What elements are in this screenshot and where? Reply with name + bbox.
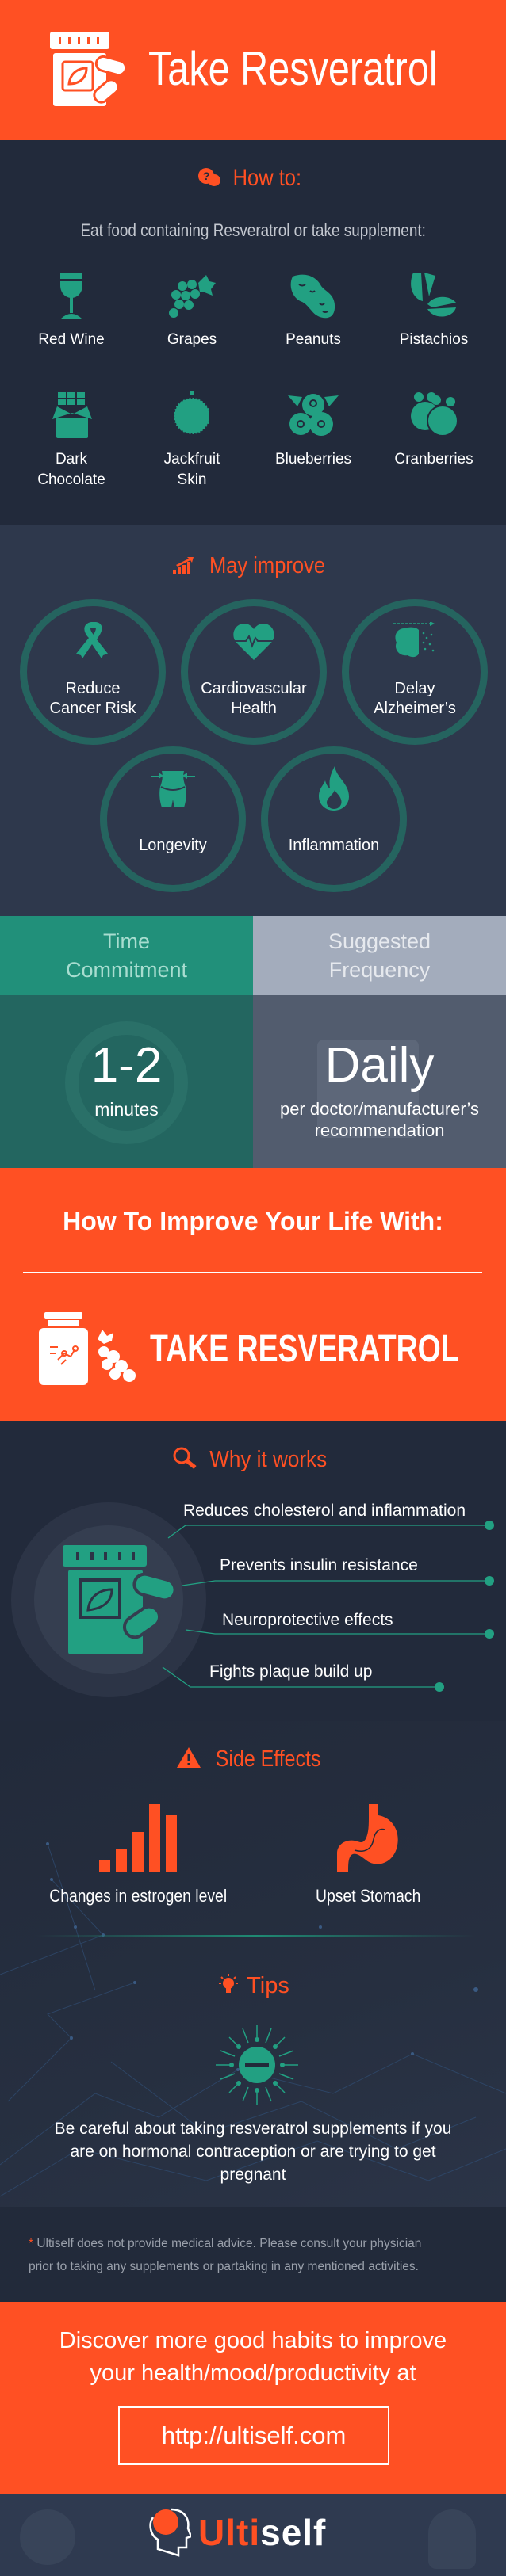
heading: may improve: May improve (209, 553, 325, 578)
icon: blueberries (288, 394, 339, 436)
label: dark chocolate: Dark (56, 451, 87, 467)
icon: sperm blocked (216, 2025, 298, 2105)
title: Take Resveratrol (148, 42, 438, 95)
heading: Why it works (209, 1447, 327, 1472)
panel: suggested frequency (253, 916, 506, 1168)
network background (0, 1842, 506, 2196)
label: dark chocolate: Chocolate (37, 471, 105, 488)
reason 4: Fights plaque build up (209, 1662, 372, 1681)
benefit: longevity (100, 746, 246, 892)
header (253, 916, 506, 995)
body: minutes (94, 1099, 159, 1120)
body: recommendation (315, 1120, 444, 1140)
label: red wine: Red Wine (38, 331, 105, 348)
url button (118, 2406, 389, 2465)
connector lines (162, 1521, 494, 1692)
logo text: Ultiself (198, 2512, 326, 2553)
icon: flame (319, 766, 349, 811)
text: Inflammation (289, 837, 379, 854)
disclaimer (0, 2207, 506, 2302)
text (374, 680, 456, 717)
tip text: Be careful about taking resveratrol supplements if you (55, 2120, 451, 2138)
benefit: reduce cancer risk (20, 599, 166, 745)
url button: http://ultiself.com (162, 2421, 346, 2449)
icon: supplement bottle (50, 32, 125, 106)
header: Commitment (66, 958, 187, 982)
panel: call to action (0, 2302, 506, 2494)
text (201, 680, 307, 717)
label: cranberries: Cranberries (394, 451, 473, 467)
icon: brain (393, 622, 435, 658)
header panel (0, 0, 506, 140)
heading: how to: ? (203, 170, 209, 182)
header (0, 916, 253, 995)
label: estrogen: Changes in estrogen level (49, 1886, 227, 1906)
panel: how to improve (0, 1168, 506, 1421)
header: Time (103, 929, 150, 953)
benefit: inflammation (261, 746, 407, 892)
faded background icons (20, 2509, 75, 2565)
benefit: delay alzheimer's (342, 599, 488, 745)
text: Cancer Risk (50, 700, 136, 717)
label: jackfruit skin: Jackfruit (164, 451, 220, 467)
body: per doctor/manufacturer’s (280, 1099, 479, 1119)
footer (0, 2494, 506, 2576)
icon: brain head (149, 2509, 191, 2557)
heading: side effects: Side Effects (216, 1746, 320, 1772)
icon: stomach (337, 1804, 398, 1872)
reason 2: Prevents insulin resistance (220, 1556, 418, 1574)
label: jackfruit skin (163, 451, 220, 488)
icon: faded calendar (317, 1040, 419, 1138)
icon: faded clock (65, 1021, 188, 1144)
icon: grapes (169, 275, 216, 318)
header: Suggested (328, 929, 431, 953)
icon: peanuts (290, 274, 335, 319)
label: dark chocolate (37, 451, 105, 488)
disclaimer: prior to taking any supplements or partaking in any mentioned activities. (29, 2260, 419, 2273)
benefit: cardiovascular health (181, 599, 327, 745)
tip text (55, 2120, 451, 2184)
graphic: bottle in circles (11, 1502, 206, 1697)
icon: pistachios (411, 273, 456, 317)
panel: time commitment (0, 916, 253, 1168)
label: jackfruit skin: Skin (178, 471, 206, 488)
disclaimer: * Ultiself does not provide medical advice. Please consult your physician (29, 2237, 421, 2250)
value: 1-2 (91, 1038, 162, 1093)
heading: tips: Tips (247, 1973, 289, 1998)
icon: bar chart (99, 1804, 177, 1872)
header: Frequency (329, 958, 430, 982)
cta text (59, 2328, 447, 2386)
icon: cranberries (411, 392, 457, 435)
icon: bottle and grapes (39, 1312, 136, 1385)
label: peanuts: Peanuts (286, 331, 341, 348)
icon: jackfruit (174, 391, 209, 434)
label: stomach: Upset Stomach (316, 1886, 420, 1906)
cta text: your health/mood/productivity at (90, 2360, 416, 2386)
panel: how to (0, 140, 506, 525)
icon: heart (233, 624, 274, 660)
tip text: pregnant (220, 2166, 286, 2184)
label: grapes: Grapes (167, 331, 217, 348)
cta text: Discover more good habits to improve (59, 2328, 447, 2353)
icon: red wine (60, 273, 82, 319)
heading: how to: How to: (233, 165, 301, 191)
subtitle: Eat food containing Resveratrol or take supplement: (80, 220, 426, 240)
text: Health (231, 700, 277, 717)
icon: dark chocolate (52, 392, 92, 438)
icon: waist (151, 771, 195, 807)
icon: ribbon (76, 622, 108, 658)
text: Longevity (139, 837, 207, 854)
body (253, 995, 506, 1168)
value: Daily (325, 1038, 434, 1093)
panel: may improve (0, 525, 506, 916)
text (50, 680, 136, 717)
heading: how to (198, 165, 301, 191)
title: take resveratrol: TAKE RESVERATROL (150, 1328, 459, 1370)
text: Cardiovascular (201, 680, 307, 697)
panel: side effects and tips (0, 1721, 506, 2207)
text: Reduce (66, 680, 120, 697)
text: Alzheimer’s (374, 700, 456, 717)
heading: How To Improve Your Life With: (63, 1207, 443, 1235)
body (0, 995, 253, 1168)
text: Delay (394, 680, 435, 697)
logo (149, 2509, 326, 2557)
tip text: are on hormonal contraception or are trying to get (70, 2143, 436, 2161)
heading: tips (219, 1973, 289, 1998)
reason 1: Reduces cholesterol and inflammation (183, 1502, 466, 1520)
label: pistachios: Pistachios (400, 331, 468, 348)
label: blueberries: Blueberries (275, 451, 351, 467)
reason 3: Neuroprotective effects (222, 1611, 393, 1629)
panel: why it works (0, 1421, 506, 1721)
